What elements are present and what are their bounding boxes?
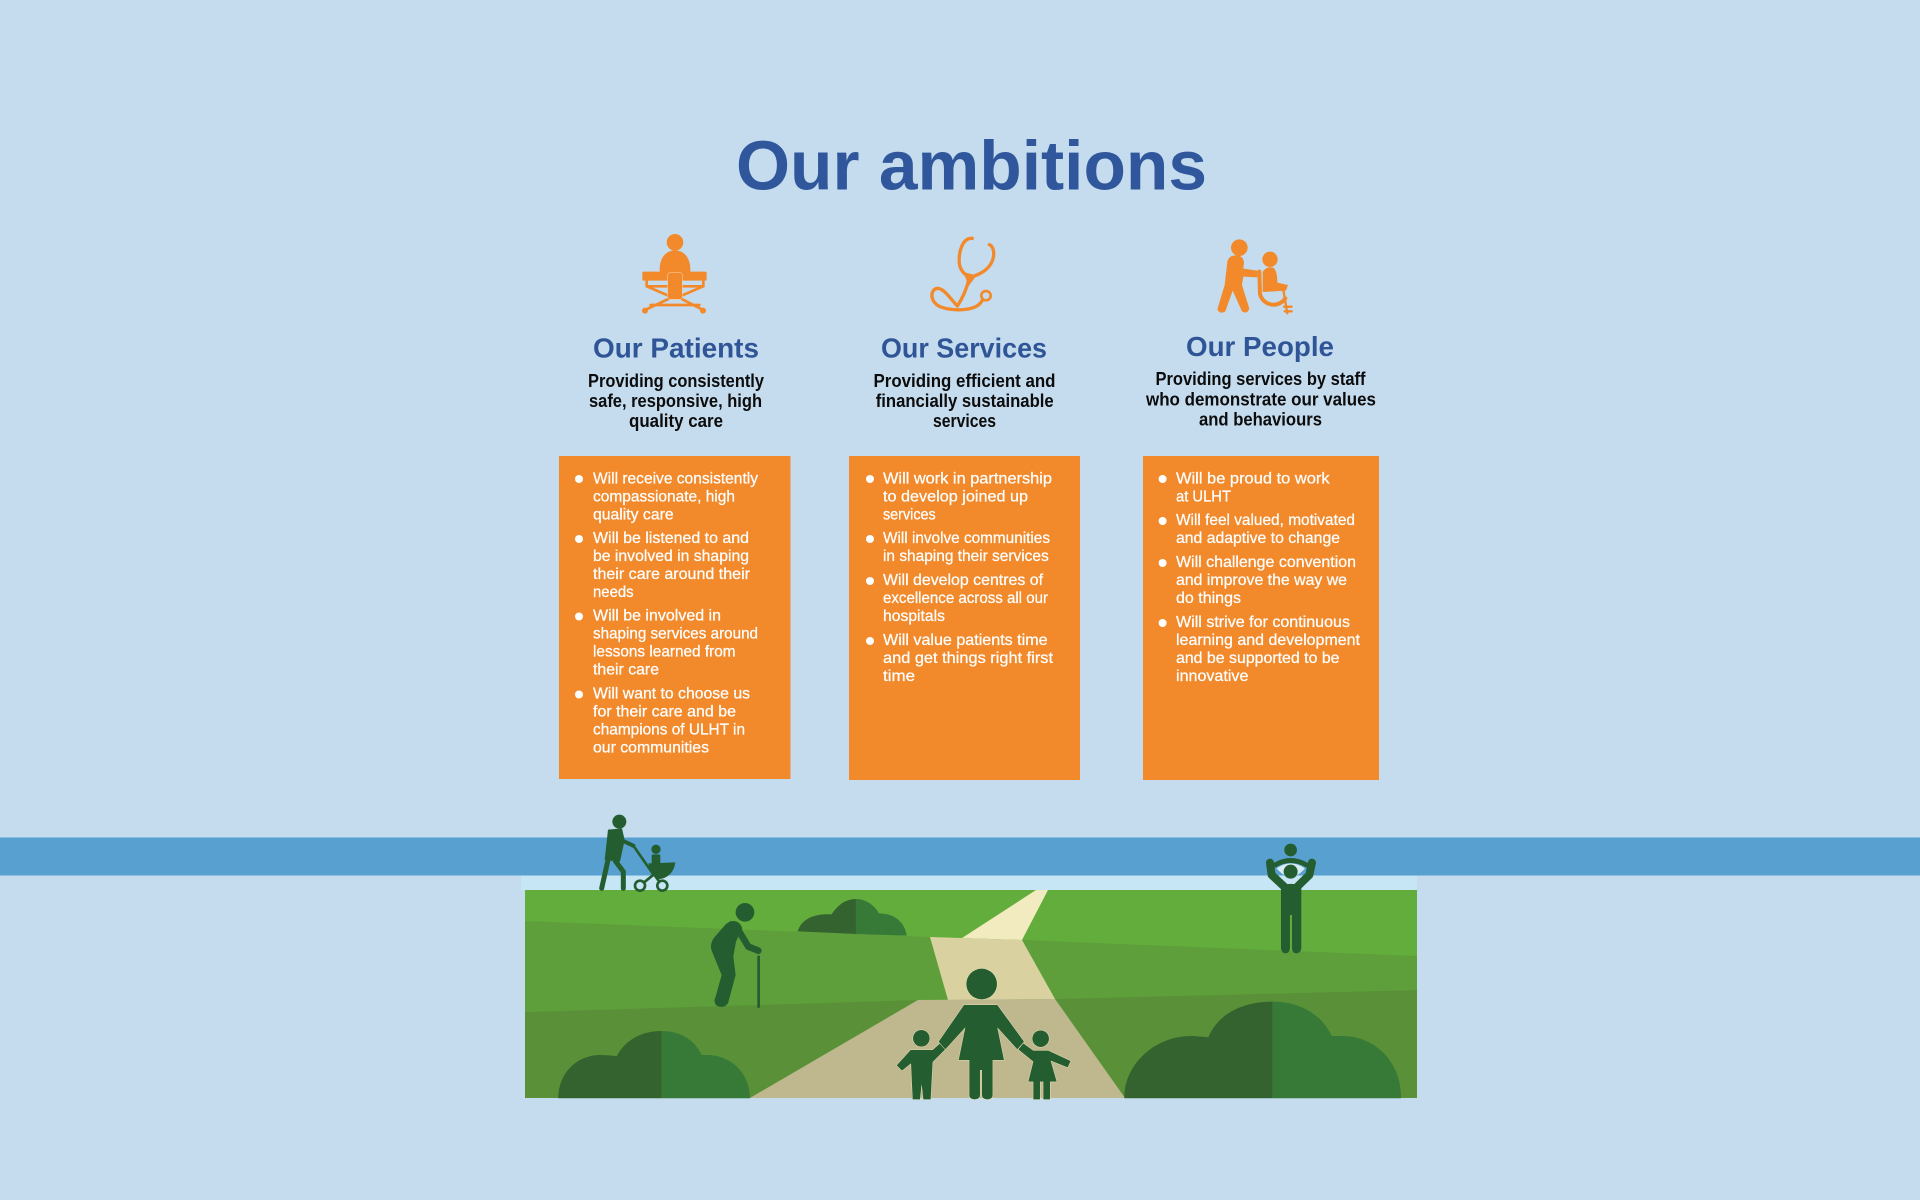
title: Our ambitions	[736, 126, 1207, 204]
panel: patients list: be involved in shaping	[593, 548, 749, 565]
panel: services list: Will involve communities	[883, 530, 1050, 547]
subtitle: people	[1145, 369, 1376, 430]
panel: patients list	[559, 456, 790, 779]
panel: services list	[849, 456, 1080, 780]
panel: people list: Will feel valued, motivated	[1176, 512, 1355, 529]
panel: patients list: compassionate, high	[593, 488, 735, 506]
panel: services list: Will value patients time	[883, 632, 1048, 649]
subtitle: people: and behaviours	[1199, 410, 1322, 430]
subtitle: services: services	[933, 411, 996, 431]
subtitle: patients: quality care	[629, 411, 723, 431]
parent	[939, 969, 1024, 1099]
figure: adult pushing pram	[602, 815, 675, 891]
landscape	[525, 890, 1417, 1098]
subtitle: patients	[588, 371, 764, 431]
panel: patients list: champions of ULHT in	[593, 722, 745, 738]
panel: patients list: lessons learned from	[593, 644, 736, 660]
subtitle: services: financially sustainable	[876, 391, 1054, 411]
figure: adult carrying child on shoulders	[1270, 844, 1312, 953]
panel: services list: hospitals	[883, 608, 945, 625]
panel: patients list: for their care and be	[593, 704, 736, 720]
panel: people list: and adaptive to change	[1176, 530, 1340, 547]
panel: people list	[1143, 456, 1379, 780]
panel: patients list: needs	[593, 584, 634, 601]
panel: patients list: Will be involved in	[593, 608, 721, 624]
subtitle: people: who demonstrate our values	[1145, 390, 1376, 410]
heading: Our Services: Our Services	[881, 332, 1047, 364]
panel: patients list: Will be listened to and	[593, 530, 749, 547]
panel: patients list: their care around their	[593, 566, 751, 583]
panel: people list: and be supported to be	[1176, 650, 1340, 667]
panel: patients list: our communities	[593, 740, 709, 756]
bush: small back	[798, 899, 907, 936]
heading: Our People: Our People	[1186, 331, 1334, 362]
panel: people list: Will strive for continuous	[1176, 614, 1350, 631]
right child	[1018, 1030, 1071, 1099]
icon: carer pushing wheelchair	[1217, 239, 1292, 313]
panel: patients list: quality care	[593, 506, 674, 524]
subtitle: patients: Providing consistently	[588, 371, 764, 391]
panel: patients list: Will receive consistently	[593, 470, 758, 488]
panel: services list: Will develop centres of	[883, 572, 1044, 589]
panel: services list: time	[883, 668, 915, 685]
panel: people list: innovative	[1176, 668, 1249, 685]
panel: people list: Will challenge convention	[1176, 554, 1356, 571]
blue horizon band	[0, 838, 1920, 876]
subtitle: services	[874, 371, 1056, 431]
panel: services list: in shaping their services	[883, 548, 1049, 565]
pale horizon strip	[521, 876, 1417, 890]
panel: services list: and get things right first	[883, 650, 1054, 667]
panel: people list: Will be proud to work	[1176, 470, 1331, 488]
panel: patients list: Will want to choose us	[593, 686, 750, 702]
subtitle: people: Providing services by staff	[1156, 369, 1366, 389]
panel: people list: and improve the way we	[1176, 572, 1347, 589]
panel: services list: excellence across all our	[883, 590, 1049, 607]
icon: patient on examination couch	[642, 234, 707, 314]
panel: services list: services	[883, 506, 936, 524]
panel: people list: learning and development	[1176, 632, 1361, 649]
figure: elderly walker with cane	[711, 903, 759, 1007]
figure: parent holding two children's hands	[897, 969, 1071, 1099]
panel: people list: do things	[1176, 590, 1241, 607]
subtitle: services: Providing efficient and	[874, 371, 1056, 391]
bush: left foreground	[558, 1031, 750, 1098]
icon: stethoscope	[932, 238, 994, 310]
panel: services list: Will work in partnership	[883, 470, 1052, 488]
heading: Our Patients: Our Patients	[593, 332, 759, 364]
left child	[897, 1030, 946, 1099]
panel: people list: at ULHT	[1176, 488, 1231, 506]
subtitle: patients: safe, responsive, high	[589, 391, 762, 411]
panel: patients list: shaping services around	[593, 626, 758, 642]
panel: services list: to develop joined up	[883, 488, 1028, 506]
panel: patients list: their care	[593, 662, 659, 678]
bush: right foreground	[1124, 1002, 1401, 1098]
